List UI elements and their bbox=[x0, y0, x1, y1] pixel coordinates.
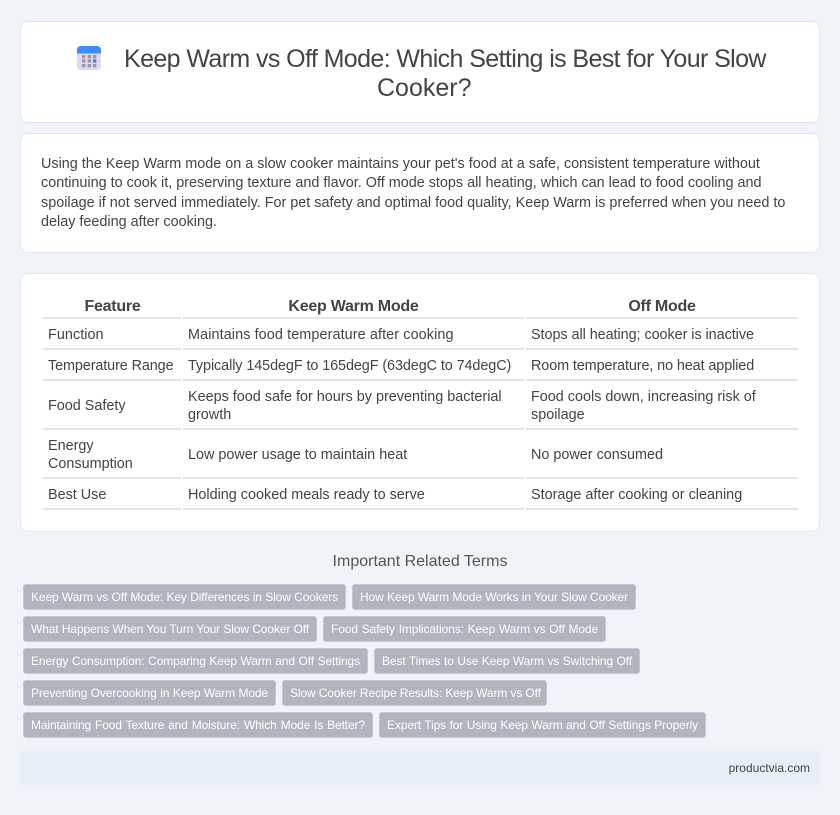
row: energy consumption: No power consumed bbox=[531, 447, 663, 463]
row: temperature range: Room temperature, no heat applied bbox=[531, 358, 754, 374]
row: best use: Storage after cooking or cleaning bbox=[531, 487, 742, 503]
related term tags: Maintaining Food Texture and Moisture: Which Mode Is Better? bbox=[31, 718, 365, 732]
row: function bbox=[48, 327, 754, 343]
row: energy consumption: Consumption bbox=[48, 456, 133, 472]
intro paragraph: spoilage if not served immediately. For pet safety and optimal food quality, Keep Warm is preferred when you need to bbox=[41, 195, 785, 211]
related term tags: Keep Warm vs Off Mode: Key Differences in Slow Cookers bbox=[31, 590, 338, 604]
row: food safety: Food cools down, increasing risk of bbox=[531, 389, 756, 405]
title: Cooker? bbox=[377, 74, 472, 102]
row: food safety: Keeps food safe for hours by preventing bacterial bbox=[188, 389, 502, 405]
related terms heading: Important Related Terms bbox=[333, 553, 507, 570]
related term tags: What Happens When You Turn Your Slow Cooker Off bbox=[31, 622, 309, 636]
related term tags: Food Safety Implications: Keep Warm vs Off Mode bbox=[331, 622, 598, 636]
row: best use: Best Use bbox=[48, 487, 106, 503]
title bbox=[124, 45, 766, 102]
intro paragraph: Using the Keep Warm mode on a slow cooker maintains your pet's food at a safe, consistent temperature without bbox=[41, 156, 760, 172]
row: food safety: growth bbox=[188, 407, 231, 423]
row: energy consumption: Low power usage to maintain heat bbox=[188, 447, 407, 463]
related term tags: Preventing Overcooking in Keep Warm Mode bbox=[31, 686, 268, 700]
comparison table card bbox=[20, 273, 820, 532]
intro paragraph: delay feeding after cooking. bbox=[41, 214, 217, 230]
comparison table bbox=[43, 298, 798, 510]
intro paragraph bbox=[41, 156, 785, 230]
row: energy consumption bbox=[48, 438, 663, 472]
row: temperature range bbox=[48, 358, 754, 374]
row: food safety: spoilage bbox=[531, 407, 585, 423]
row: energy consumption: Energy bbox=[48, 438, 94, 454]
related term tags: How Keep Warm Mode Works in Your Slow Cooker bbox=[360, 590, 628, 604]
table header: Keep Warm Mode bbox=[288, 298, 419, 315]
table header: Off Mode bbox=[628, 298, 696, 315]
intro card bbox=[20, 133, 820, 253]
title: Keep Warm vs Off Mode: Which Setting is Best for Your Slow bbox=[124, 45, 766, 73]
footer bar bbox=[20, 751, 820, 785]
row: temperature range: Typically 145degF to 165degF (63degC to 74degC) bbox=[188, 358, 511, 374]
row: function: Maintains food temperature after cooking bbox=[188, 327, 454, 343]
table header bbox=[84, 298, 696, 315]
title card bbox=[20, 21, 820, 123]
row: food safety: Food Safety bbox=[48, 398, 126, 414]
row: function: Function bbox=[48, 327, 104, 343]
related term tags: Slow Cooker Recipe Results: Keep Warm vs Off bbox=[290, 686, 541, 700]
row: food safety bbox=[48, 389, 756, 423]
footer source: productvia.com bbox=[729, 761, 810, 775]
related term tags: Energy Consumption: Comparing Keep Warm and Off Settings bbox=[31, 654, 360, 668]
related term tags: Expert Tips for Using Keep Warm and Off Settings Properly bbox=[387, 718, 698, 732]
intro paragraph: continuing to cook it, preserving texture and flavor. Off mode stops all heating, which can lead to food cooling and bbox=[41, 175, 762, 191]
icon: calendar bbox=[77, 46, 101, 70]
row: function: Stops all heating; cooker is inactive bbox=[531, 327, 754, 343]
row: best use: Holding cooked meals ready to serve bbox=[188, 487, 425, 503]
table header: Feature bbox=[84, 298, 141, 315]
related term tags: Best Times to Use Keep Warm vs Switching Off bbox=[382, 654, 632, 668]
row: temperature range: Temperature Range bbox=[48, 358, 174, 374]
related term tags bbox=[23, 584, 706, 738]
row: best use bbox=[48, 487, 742, 503]
